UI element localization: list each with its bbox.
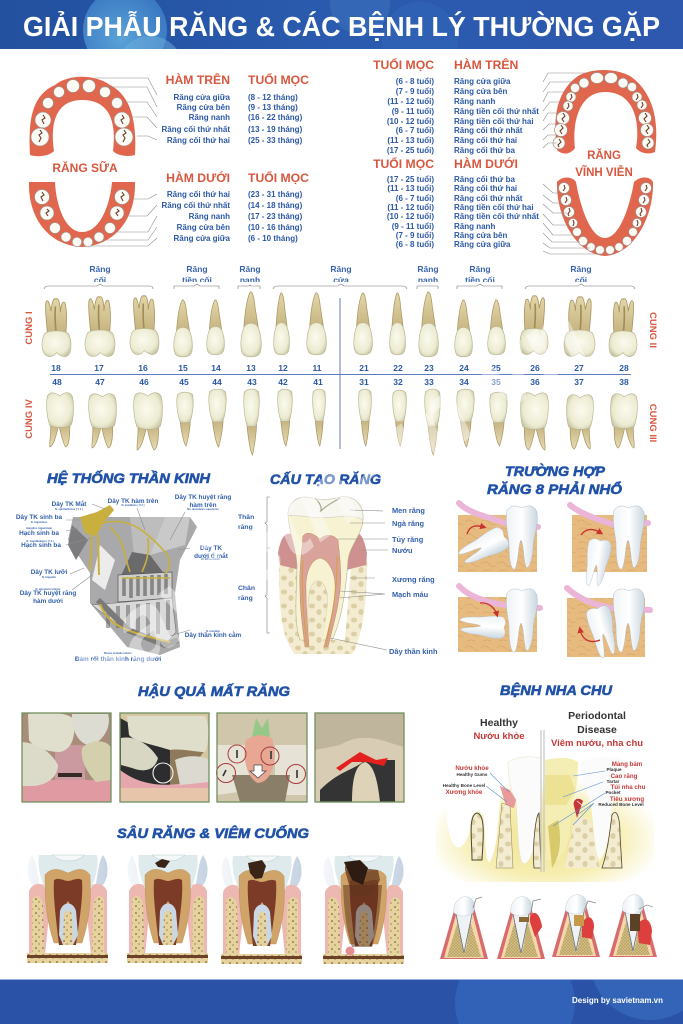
tooth numbers upper: 28 <box>619 363 629 373</box>
perio text labels: Nướu khỏe <box>473 731 525 742</box>
tooth group labels: Răng <box>469 264 491 274</box>
tooth structure labels: Nướu <box>392 546 413 555</box>
list: permanent lower: Răng cối thứ nhất <box>454 194 523 203</box>
tooth group labels: Răng <box>330 264 352 274</box>
perio text labels: Periodontal <box>568 710 626 722</box>
tooth numbers lower: 46 <box>139 377 149 387</box>
tooth numbers upper: 11 <box>312 363 322 373</box>
list: permanent lower: (7 - 9 tuổi) <box>396 231 434 240</box>
tooth structure labels: Dây thần kinh <box>389 647 438 656</box>
perio text labels: Healthy Bone Level <box>443 783 485 788</box>
diagram: healthy tooth <box>27 855 108 963</box>
list: permanent lower: Răng cối thứ ba <box>454 175 515 184</box>
tooth group labels: tiền cối <box>465 275 495 285</box>
tooth group labels <box>40 264 640 289</box>
tooth group labels: Răng <box>186 264 208 274</box>
heading: permanent teeth: VĨNH VIỄN <box>575 166 633 179</box>
list: permanent lower: Răng nanh <box>454 222 495 231</box>
tooth group labels: Răng <box>239 264 261 274</box>
nerve labels: N. infraorbitalis <box>201 557 221 561</box>
list: primary lower <box>162 170 309 243</box>
list: primary upper: (16 - 22 tháng) <box>248 113 303 122</box>
nerve labels: N. lingualis <box>42 575 56 579</box>
list: permanent lower: (11 - 12 tuổi) <box>387 203 434 212</box>
quadrant labels: CUNG II <box>647 312 658 348</box>
list: primary lower: (6 - 10 tháng) <box>248 234 298 243</box>
photo: jaw joint <box>315 713 404 802</box>
tooth numbers lower: 47 <box>95 377 105 387</box>
list: primary upper: (25 - 33 tháng) <box>248 136 303 145</box>
list: permanent lower: Răng tiền cối thứ nhất <box>454 212 539 221</box>
list: primary upper: (8 - 12 tháng) <box>248 93 298 102</box>
perio text labels: Disease <box>577 724 617 736</box>
list: primary upper: Răng cối thứ hai <box>167 136 230 145</box>
list: permanent lower: (11 - 13 tuổi) <box>387 184 434 193</box>
tooth numbers upper: 14 <box>211 363 221 373</box>
list: permanent upper: (7 - 9 tuổi) <box>396 87 434 96</box>
nerve labels: Nn. alveolares superiores <box>187 507 219 511</box>
tooth structure labels <box>238 497 438 656</box>
tooth structure labels: Ngà răng <box>392 519 425 528</box>
tooth numbers upper: 13 <box>246 363 256 373</box>
nerve labels: N. mandibularis ( V 3 ) <box>26 539 54 543</box>
diagram: pulp caries and abscess <box>323 856 404 964</box>
tooth group labels: Răng <box>570 264 592 274</box>
diagram: primary teeth lower arch <box>29 182 157 247</box>
nerve labels: Hạch sinh ba <box>19 530 59 537</box>
tooth group labels: cối <box>575 275 587 285</box>
tooth numbers lower: 31 <box>359 377 369 387</box>
list: primary lower: (14 - 18 tháng) <box>248 201 303 210</box>
quadrant labels: CUNG IV <box>24 399 35 439</box>
tooth numbers upper: 23 <box>424 363 434 373</box>
nerve labels: N. ophthalmicus ( V 1 ) <box>55 507 83 511</box>
list: permanent lower <box>373 156 539 249</box>
tooth numbers lower: 34 <box>459 377 469 387</box>
list: permanent lower: Răng tiền cối thứ hai <box>454 203 534 212</box>
tooth group labels: nanh <box>240 275 260 285</box>
tooth structure labels: Tủy răng <box>392 535 424 544</box>
diagram: gum disease stages <box>440 895 657 959</box>
perio text labels: Xương khỏe <box>446 789 483 796</box>
list: primary upper: Răng cối thứ nhất <box>162 125 230 134</box>
tooth structure labels: Chân <box>238 585 255 592</box>
list: primary lower: Răng cối thứ nhất <box>162 201 230 210</box>
list: primary upper: Răng cửa bên <box>177 103 230 112</box>
nerve labels: hàm trên <box>190 502 217 509</box>
list: permanent upper: (11 - 13 tuổi) <box>387 136 434 145</box>
tooth group labels: Răng <box>417 264 439 274</box>
diagram: healthy versus periodontal comparison <box>436 730 654 882</box>
diagram: permanent teeth upper arch <box>543 70 656 154</box>
tooth numbers upper: 21 <box>359 363 369 373</box>
nerve labels: N. alveolaris inferior <box>36 587 60 591</box>
list: permanent upper: (17 - 25 tuổi) <box>387 146 434 155</box>
tooth structure labels: Men răng <box>392 506 425 515</box>
perio text labels: Viêm nướu, nha chu <box>551 738 643 749</box>
diagram: tooth cross-section <box>278 497 367 654</box>
list: permanent upper: (10 - 12 tuổi) <box>387 117 434 126</box>
tooth numbers upper: 15 <box>178 363 188 373</box>
tooth numbers upper: 17 <box>94 363 104 373</box>
perio text labels: Túi nha chu <box>611 784 646 791</box>
tooth numbers lower: 33 <box>424 377 434 387</box>
tooth numbers lower <box>52 377 629 387</box>
photo: missing tooth gap <box>22 712 111 802</box>
list: permanent upper: Răng cửa bên <box>454 87 507 96</box>
nerve labels: Dây TK sinh ba <box>16 514 63 521</box>
panel: impacted tooth case 2 <box>570 505 648 588</box>
footer banner <box>0 979 683 1024</box>
quadrant labels: CUNG III <box>647 404 658 442</box>
list: primary upper: (13 - 19 tháng) <box>248 125 303 134</box>
list: permanent lower: (6 - 8 tuổi) <box>396 240 434 249</box>
tooth numbers lower: 44 <box>212 377 222 387</box>
list: permanent lower: TUỔI MỌC <box>373 156 434 171</box>
heading: tooth structure: CẤU TẠO RĂNG <box>270 470 381 487</box>
list: permanent upper: (6 - 7 tuổi) <box>396 126 434 135</box>
diagram: enamel caries <box>127 855 208 963</box>
list: permanent lower: (10 - 12 tuổi) <box>387 212 434 221</box>
tooth numbers lower: 37 <box>574 377 584 387</box>
list: primary lower: Răng cửa bên <box>177 223 230 232</box>
list: permanent upper: (6 - 8 tuổi) <box>396 77 434 86</box>
perio text labels: Healthy Gums <box>457 772 488 777</box>
list: permanent upper: Răng cối thứ hai <box>454 136 517 145</box>
perio text labels: Tartar <box>607 779 620 784</box>
list: permanent upper: TUỔI MỌC <box>373 57 434 72</box>
heading: primary teeth: RĂNG SỮA <box>52 160 118 175</box>
tooth numbers upper: 27 <box>574 363 584 373</box>
list: primary lower: Răng cửa giữa <box>174 234 231 243</box>
nerve labels: Dây thần kinh cằm <box>185 630 242 639</box>
perio text labels: Plaque <box>606 767 622 772</box>
teeth: upper row <box>42 292 637 357</box>
quadrant labels: CUNG I <box>24 311 35 345</box>
title: GIẢI PHẪU RĂNG & CÁC BỆNH LÝ THƯỜNG GẶP <box>23 10 660 42</box>
perio text labels: Healthy <box>480 717 518 729</box>
nerve labels: Ganglion trigeminale <box>26 526 52 530</box>
tooth numbers upper: 12 <box>278 363 288 373</box>
tooth numbers lower: 43 <box>247 377 257 387</box>
list: permanent lower: HÀM DƯỚI <box>454 156 518 171</box>
teeth: lower row <box>47 389 637 455</box>
tooth numbers lower: 38 <box>619 377 629 387</box>
list: permanent upper: Răng tiền cối thứ nhất <box>454 107 539 116</box>
tooth structure labels: răng <box>238 595 253 602</box>
list: permanent lower: Răng cửa bên <box>454 231 507 240</box>
heading: caries and periapical inflammation: SÂU RĂNG & VIÊM CUỐNG <box>117 824 309 841</box>
tooth group labels: nanh <box>418 275 438 285</box>
tooth numbers upper <box>51 363 629 373</box>
watermark: savietnam.vn <box>47 280 606 717</box>
list: primary upper: (9 - 13 tháng) <box>248 103 298 112</box>
list: permanent upper: (9 - 11 tuổi) <box>392 107 434 116</box>
perio text labels: Reduced Bone Level <box>598 802 644 807</box>
list: primary lower: TUỔI MỌC <box>248 170 309 185</box>
tooth group labels: cửa <box>333 275 349 285</box>
footer credit: Design by savietnam.vn <box>572 996 663 1005</box>
tooth structure labels: Mạch máu <box>392 590 429 599</box>
list: primary upper: TUỔI MỌC <box>248 72 309 87</box>
nerve labels: Dây TK huyệt răng <box>20 590 76 597</box>
tooth numbers lower: 36 <box>530 377 540 387</box>
list: primary upper: Răng cửa giữa <box>174 93 231 102</box>
tooth numbers lower: 41 <box>313 377 323 387</box>
list: primary lower: Răng cối thứ hai <box>167 190 230 199</box>
tooth numbers upper: 24 <box>459 363 469 373</box>
tooth group labels: tiền cối <box>182 275 212 285</box>
perio text labels <box>443 710 646 826</box>
list: primary upper <box>162 72 309 145</box>
list: permanent upper <box>373 57 539 155</box>
photo: tooth drift <box>120 713 209 802</box>
panel: impacted tooth case 4 <box>567 588 650 659</box>
list: primary lower: HÀM DƯỚI <box>166 170 230 185</box>
tooth numbers upper: 18 <box>51 363 61 373</box>
nerve labels: Dây TK huyệt răng <box>175 494 231 501</box>
heading: permanent teeth <box>575 149 633 179</box>
tooth numbers lower: 42 <box>278 377 288 387</box>
heading: wisdom tooth extraction <box>487 462 622 497</box>
list: primary lower: (10 - 16 tháng) <box>248 223 303 232</box>
list: permanent upper: Răng cửa giữa <box>454 77 511 86</box>
nerve labels: Dây TK lưỡi <box>31 569 67 576</box>
heading: periodontal disease: BỆNH NHA CHU <box>500 681 613 698</box>
tooth numbers lower: 45 <box>179 377 189 387</box>
diagram: dentin caries <box>221 856 302 964</box>
tooth numbers upper: 26 <box>530 363 540 373</box>
list: permanent lower: (17 - 25 tuổi) <box>387 175 434 184</box>
tooth structure labels: Xương răng <box>392 575 435 584</box>
header banner <box>0 0 683 49</box>
nerve labels: Đám rối thần kinh răng dưới <box>75 654 161 663</box>
list: permanent upper: Răng tiền cối thứ hai <box>454 117 534 126</box>
tooth group labels: cối <box>94 275 106 285</box>
list: permanent upper: Răng nanh <box>454 97 495 106</box>
perio text labels: Nướu khỏe <box>455 765 489 772</box>
list: primary upper: Răng nanh <box>189 113 230 122</box>
list: permanent lower: (9 - 11 tuổi) <box>392 222 434 231</box>
tooth numbers upper: 22 <box>393 363 403 373</box>
nerve labels: Dây TK <box>200 545 222 552</box>
diagram: skull and nerves <box>68 505 197 655</box>
nerve labels: N. trigeminus <box>31 520 48 524</box>
heading: nervous system: HỆ THỐNG THẦN KINH <box>47 469 211 486</box>
heading: permanent teeth: RĂNG <box>587 149 621 162</box>
nerve labels <box>16 494 242 663</box>
heading: consequences of tooth loss: HẬU QUẢ MẤT RĂNG <box>138 682 290 699</box>
heading: wisdom tooth extraction: RĂNG 8 PHẢI NHỔ <box>487 480 622 497</box>
tooth structure labels: răng <box>238 524 253 531</box>
tooth group labels: Răng <box>89 264 111 274</box>
nerve labels: N. mentalis <box>206 629 220 633</box>
list: permanent lower: (6 - 7 tuổi) <box>396 194 434 203</box>
list: permanent lower: Răng cửa giữa <box>454 240 511 249</box>
tooth numbers lower: 48 <box>52 377 62 387</box>
tooth numbers upper: 25 <box>491 363 501 373</box>
photo: overeruption <box>216 713 307 802</box>
nerve labels: Dây TK hàm trên <box>108 498 158 505</box>
perio text labels: Tiêu xương <box>610 796 644 803</box>
list: permanent upper: (11 - 12 tuổi) <box>387 97 434 106</box>
list: permanent lower: Răng cối thứ hai <box>454 184 517 193</box>
list: permanent upper: Răng cối thứ ba <box>454 146 515 155</box>
tooth structure labels: Thân <box>238 514 254 521</box>
list: permanent upper: Răng cối thứ nhất <box>454 126 523 135</box>
quadrant labels <box>24 311 658 442</box>
nerve labels: Hạch sinh ba <box>21 542 61 549</box>
heading: wisdom tooth extraction: TRƯỜNG HỢP <box>505 462 606 479</box>
tooth numbers lower: 35 <box>491 377 501 387</box>
nerve labels: Dây TK Mắt <box>52 499 87 508</box>
perio text labels: Mảng bám <box>612 761 643 768</box>
panel: impacted tooth case 1 <box>456 503 538 572</box>
list: primary upper: HÀM TRÊN <box>166 72 230 87</box>
nerve labels: dưới ổ mắt <box>194 551 229 560</box>
tooth numbers upper: 16 <box>138 363 148 373</box>
nerve labels: Plexus dentalis inferior <box>104 651 132 655</box>
list: primary lower: Răng nanh <box>189 212 230 221</box>
diagram: permanent teeth lower arch <box>543 178 653 256</box>
panel: impacted tooth case 3 <box>458 586 540 652</box>
diagram: primary teeth upper arch <box>30 77 157 156</box>
nerve labels: hàm dưới <box>33 598 63 605</box>
list: permanent upper: HÀM TRÊN <box>454 57 518 72</box>
list: primary lower: (17 - 23 tháng) <box>248 212 303 221</box>
list: primary lower: (23 - 31 tháng) <box>248 190 303 199</box>
nerve labels: N. maxillaris ( V 2 ) <box>121 503 145 507</box>
tooth numbers lower: 32 <box>393 377 403 387</box>
perio text labels: Cao răng <box>611 773 638 780</box>
perio text labels: Pocket <box>605 790 621 795</box>
